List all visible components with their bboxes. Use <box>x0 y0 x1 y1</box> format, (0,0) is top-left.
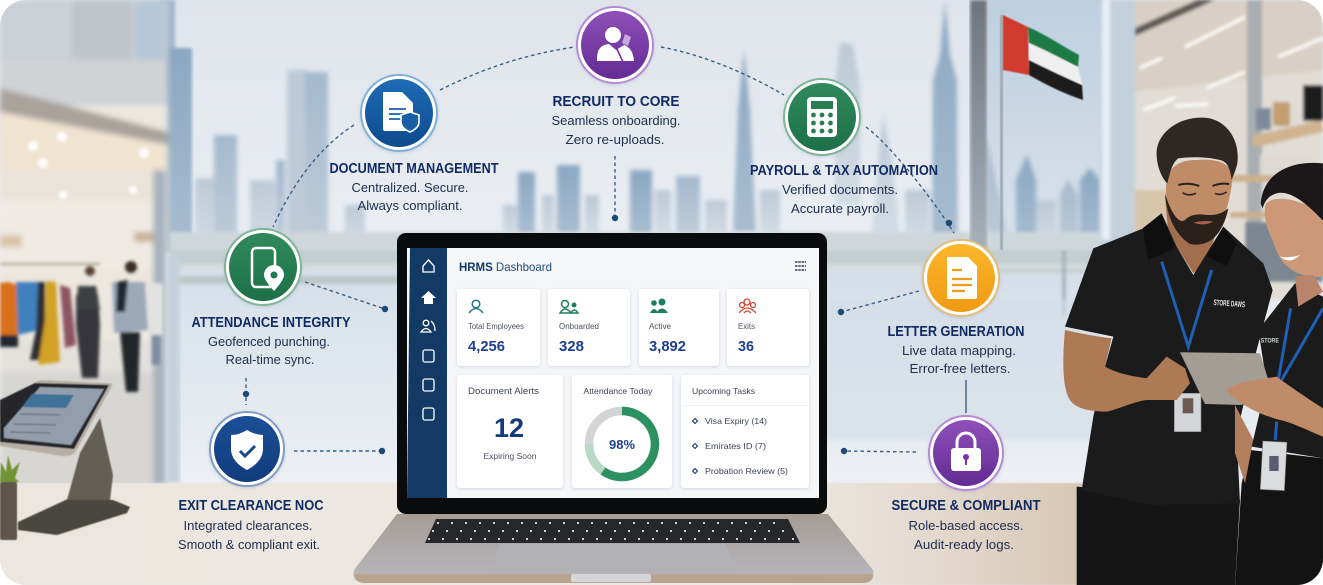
stat card: active: 3,892 <box>649 338 686 355</box>
laptop <box>354 233 874 583</box>
feature: attendance integrity <box>192 229 351 367</box>
feature: exit clearance noc <box>178 412 324 552</box>
upcoming tasks card: Upcoming Tasks <box>692 386 755 396</box>
feature: payroll and tax automation: Accurate payroll. <box>791 201 889 216</box>
stat card: exits: 36 <box>738 338 754 355</box>
feature: payroll and tax automation: Verified documents. <box>782 182 898 197</box>
feature: letter generation <box>888 240 1024 376</box>
feature: document management: Centralized. Secure. <box>352 180 468 195</box>
icon: calculator <box>784 79 860 155</box>
waterfront and floor <box>169 230 1104 438</box>
keyboard <box>425 519 800 543</box>
upcoming tasks card: Probation Review (5) <box>705 466 788 476</box>
feature: document management <box>330 75 499 213</box>
laptop base <box>354 514 874 583</box>
stat card: onboarded: Onboarded <box>559 322 599 331</box>
window pillar <box>970 0 987 250</box>
feature: document management: Always compliant. <box>358 198 462 213</box>
upcoming tasks card: Visa Expiry (14) <box>705 416 767 426</box>
feature: secure and compliant: Role-based access. <box>908 518 1024 533</box>
feature: attendance integrity: ATTENDANCE INTEGRITY <box>192 315 351 331</box>
icon: recruit <box>577 7 653 83</box>
feature: payroll and tax automation <box>750 79 938 216</box>
potted plant <box>0 455 20 540</box>
menu icon <box>795 262 806 270</box>
people <box>1063 118 1323 585</box>
icon: document <box>361 75 437 151</box>
clothing rack and shoppers <box>0 261 163 392</box>
feature: attendance integrity: Geofenced punching. <box>208 334 330 349</box>
connectors <box>243 47 966 454</box>
feature: letter generation: Live data mapping. <box>902 343 1016 358</box>
attendance card <box>572 375 672 488</box>
feature: exit clearance noc: EXIT CLEARANCE NOC <box>178 498 324 514</box>
donut chart <box>589 411 655 477</box>
feature: document management: DOCUMENT MANAGEMENT <box>330 161 499 177</box>
icon: phone with pin <box>225 229 301 305</box>
feature: recruit to core: Zero re-uploads. <box>566 132 664 147</box>
man torso: STORE DAWS <box>1213 298 1246 309</box>
feature: attendance integrity: Real-time sync. <box>226 352 314 367</box>
stat card: total employees: 4,256 <box>468 338 505 355</box>
tabletop <box>0 483 1082 585</box>
upcoming tasks card: Emirates ID (7) <box>705 441 766 451</box>
woman <box>1235 163 1323 585</box>
document alerts card <box>457 375 563 488</box>
attendance card: 98% <box>609 437 635 452</box>
dashboard title: HRMS Dashboard <box>459 260 552 274</box>
laptop bezel <box>397 233 827 514</box>
document alerts card: Expiring Soon <box>484 451 537 461</box>
feature: payroll and tax automation: PAYROLL & TAX AUTOMATION <box>750 163 938 179</box>
handheld tablet <box>1180 352 1270 405</box>
attendance card: Attendance Today <box>584 386 653 396</box>
stat card: exits: Exits <box>738 322 755 331</box>
feature: exit clearance noc: Smooth & compliant exit. <box>178 537 320 552</box>
stat card: active <box>639 289 719 366</box>
icon: padlock <box>929 416 1003 490</box>
feature: recruit to core: RECRUIT TO CORE <box>552 94 680 110</box>
stat card: onboarded: 328 <box>559 338 584 355</box>
feature: secure and compliant: SECURE & COMPLIANT <box>892 498 1041 514</box>
feature: secure and compliant: Audit-ready logs. <box>914 537 1014 552</box>
sidebar <box>407 248 447 498</box>
feature: recruit to core: Seamless onboarding. <box>552 113 680 128</box>
stat card: total employees <box>457 289 540 366</box>
feature: recruit to core <box>552 7 680 147</box>
feature: exit clearance noc: Integrated clearances. <box>184 518 312 533</box>
stat card: onboarded <box>548 289 630 366</box>
woman forearm and hand <box>1226 377 1323 437</box>
ceiling lights <box>28 132 149 199</box>
man torso <box>1065 118 1273 585</box>
feature: secure and compliant <box>892 416 1041 552</box>
near tower left <box>160 0 192 253</box>
stat card: exits <box>727 289 809 366</box>
mall interior left <box>0 0 168 490</box>
woman: STORE <box>1261 339 1279 345</box>
skyline <box>195 0 1100 250</box>
icon: letter <box>923 240 999 316</box>
feature: letter generation: LETTER GENERATION <box>888 324 1024 340</box>
stat card: total employees: Total Employees <box>468 322 524 331</box>
feature: letter generation: Error-free letters. <box>910 361 1010 376</box>
upcoming tasks card <box>681 375 809 488</box>
man forearm and hand <box>1063 330 1190 412</box>
icon: shield <box>210 412 284 486</box>
document alerts card: Document Alerts <box>468 386 540 396</box>
store interior right <box>1100 0 1323 300</box>
stat card: active: Active <box>649 322 672 331</box>
UAE flag <box>1003 15 1083 100</box>
POS tablet stand <box>0 380 130 535</box>
document alerts card: 12 <box>494 413 524 443</box>
